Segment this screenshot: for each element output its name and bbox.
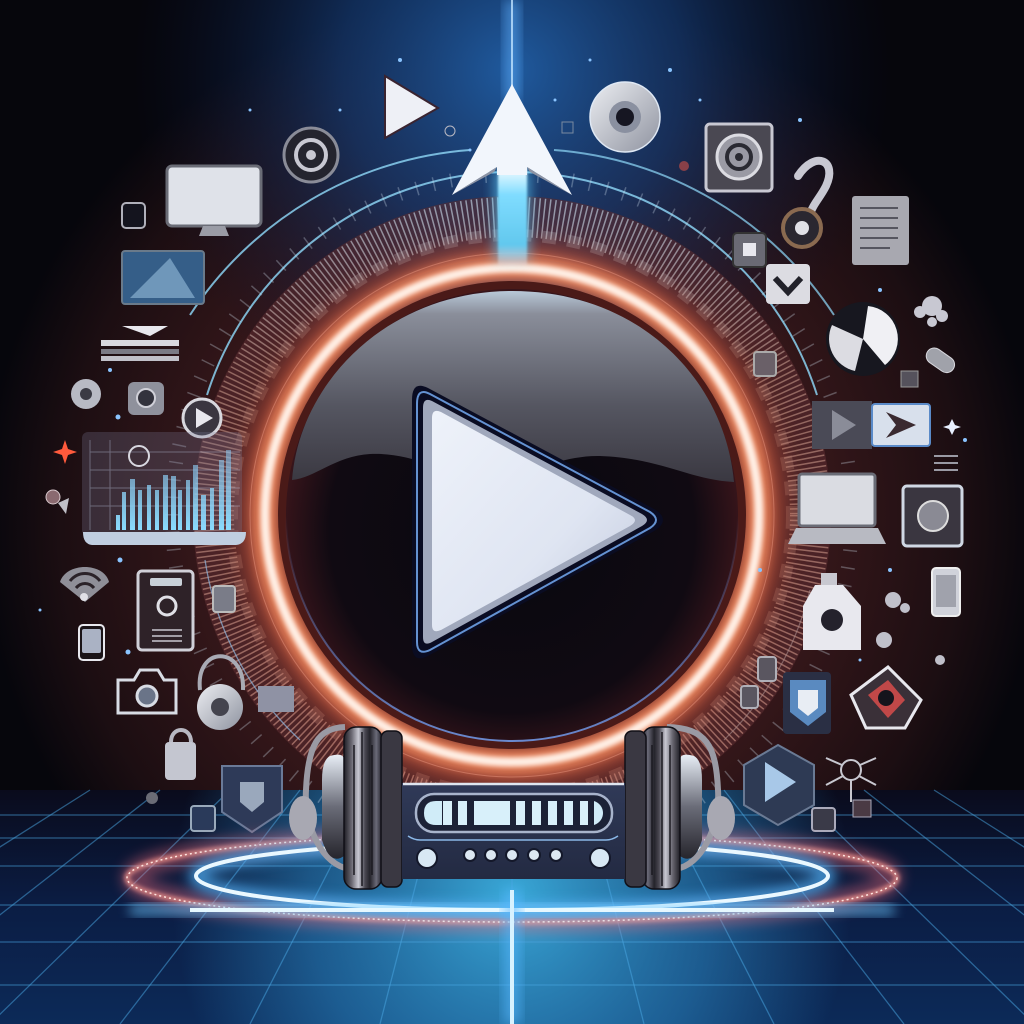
chart panel bbox=[82, 432, 246, 545]
icon: tablet bbox=[79, 625, 104, 660]
icon: target top left bbox=[284, 128, 338, 182]
icon: hex gem bbox=[851, 667, 921, 728]
radial tick arcs bbox=[172, 150, 852, 855]
icon: stacked book bbox=[101, 326, 179, 361]
grid floor bbox=[0, 790, 1024, 1024]
icon: square speaker bbox=[706, 124, 772, 191]
central disc bbox=[278, 281, 746, 749]
icon: small squares lower left bbox=[146, 792, 215, 831]
icon: small cluster bbox=[876, 592, 945, 665]
icon: monitor bbox=[167, 166, 261, 236]
icon: hexagon play bbox=[744, 745, 814, 825]
icon: chevron tile bbox=[766, 264, 810, 304]
icon: document bbox=[852, 196, 909, 265]
icon: small play triangle bbox=[385, 76, 438, 138]
icon: screen image bbox=[122, 251, 204, 304]
icon: camera small left bbox=[128, 382, 164, 415]
icon: disc top right bbox=[590, 82, 660, 152]
left ear cup bbox=[289, 727, 402, 889]
icon: square camera bbox=[903, 486, 962, 546]
icon: small bottom tiles bbox=[812, 800, 871, 831]
icon: wifi bbox=[60, 567, 109, 602]
icon: small tile far right bbox=[901, 371, 918, 387]
vertical light beam at the top bbox=[505, 0, 519, 100]
icon: shield lower left bbox=[222, 766, 282, 832]
icon: small square top left bbox=[122, 203, 145, 228]
headphones device bbox=[289, 727, 735, 889]
icon: video panel bbox=[812, 401, 930, 449]
icon: insect bbox=[826, 758, 876, 802]
glowing ring bbox=[262, 265, 762, 765]
up arrow bbox=[452, 84, 572, 265]
icon: padlock ring bbox=[197, 656, 243, 730]
floor vertical beam bbox=[504, 890, 520, 1024]
icon: menu lines bbox=[934, 456, 958, 470]
icon: small tile right of ring bbox=[754, 352, 776, 376]
sparkle particles bbox=[38, 58, 967, 662]
icon: shield badge bbox=[783, 672, 831, 734]
icon: hook bbox=[783, 161, 829, 247]
play button triangle bbox=[412, 386, 663, 658]
icon: small pin bbox=[46, 490, 69, 514]
icon: laptop bbox=[788, 474, 886, 544]
left headphone band bbox=[306, 727, 345, 868]
icon: id card bbox=[138, 571, 193, 650]
icon: phone bbox=[932, 568, 960, 616]
icon: pill bbox=[923, 345, 958, 376]
right headphone band bbox=[667, 727, 718, 868]
icon: small print bbox=[213, 586, 235, 612]
icon: camera outline bbox=[118, 670, 176, 713]
icon: blue star bbox=[943, 419, 961, 435]
floor glow rings bbox=[127, 834, 897, 922]
icon: pie disc bbox=[826, 302, 900, 376]
icon: small tiles near ring bbox=[741, 657, 776, 708]
icon: gear left bbox=[71, 379, 101, 409]
icon: small tile upper right bbox=[733, 233, 766, 267]
right ear cup bbox=[625, 727, 735, 889]
icon: bottle bbox=[803, 573, 861, 650]
icon: padlock small bbox=[165, 730, 196, 780]
icon: small play circle bbox=[183, 399, 221, 437]
center console bbox=[402, 783, 625, 879]
icon: flower gear bbox=[914, 296, 948, 327]
icon: red star spark bbox=[53, 440, 77, 464]
icon: small folder bbox=[258, 686, 294, 712]
disc gloss bbox=[292, 291, 734, 482]
